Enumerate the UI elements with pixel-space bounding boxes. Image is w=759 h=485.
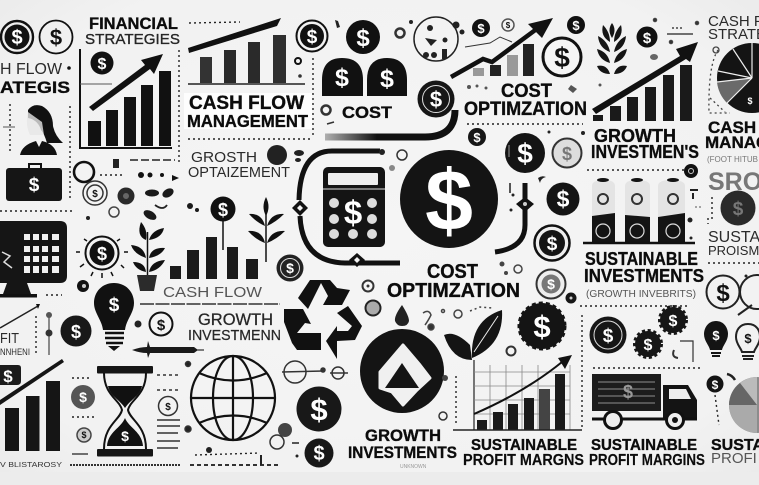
icon: drop	[395, 305, 409, 326]
heading: growth investments	[591, 126, 699, 162]
icon: black bulb right	[704, 321, 728, 356]
icons: marks around big coin	[379, 130, 585, 212]
label: groth optimizement: OPTAIZEMENT	[188, 164, 290, 181]
bar chart: rising bars with arrow	[80, 49, 172, 148]
icon: outlined coin top left	[40, 20, 72, 54]
divider: dotted vertical and horizontal	[580, 306, 700, 430]
icon: truck	[592, 374, 697, 428]
marks: left dotted details	[0, 295, 62, 356]
frame: dotted rules	[188, 58, 313, 139]
heading: cash flow management: MANAGEMENT	[187, 111, 308, 131]
bar chart: mini bars with zig arrow	[451, 18, 553, 77]
heading: sustainable investments: INVESTMENTS	[584, 266, 704, 286]
icons: marks right of vials	[688, 189, 702, 240]
icon: gray outlined coin	[552, 138, 582, 168]
label: sustain and programs right edge: PROISM	[708, 243, 759, 258]
heading: growth investments bottom: UNKNOWN	[400, 464, 427, 470]
icon: scattered leaves	[142, 187, 199, 222]
heading: cost: COST	[342, 103, 393, 122]
heading: cash management right edge	[705, 118, 759, 164]
icon: small mark near bags	[322, 20, 340, 124]
heading: sustain profit right edge: PROFI	[711, 450, 757, 467]
icon: outlined coin middle: $	[157, 317, 166, 334]
heading: growth investments: INVESTMEN'S	[591, 142, 699, 162]
heading: financial strategies	[85, 14, 180, 48]
icon: doodle oval	[414, 17, 458, 61]
icon: coin with rays	[76, 236, 128, 278]
heading: financial strategies: STRATEGIES	[85, 31, 180, 48]
marker: left diamond	[292, 200, 308, 216]
heading: sustain profit right edge	[711, 437, 759, 467]
bar chart: rising bars with big arrow	[592, 42, 698, 121]
heading: cash flow management: CASH FLOW	[189, 93, 304, 114]
heading: sustainable investments: (GROWTH INVEBRITS)	[586, 289, 696, 300]
icon: circle with triangular recycle	[360, 329, 444, 413]
icon: partial outlined coin and key	[738, 274, 759, 315]
icon: small outline ring: $	[506, 21, 511, 30]
icon: gear coin large: $	[533, 309, 551, 344]
icon: small coin right	[567, 16, 585, 34]
icon: small gray coin	[366, 300, 380, 316]
bar chart: lower left bars	[0, 359, 64, 451]
icon: fern	[597, 23, 627, 74]
icons: coins left of hourglass: $	[81, 430, 87, 440]
connector: thick curved line around coin	[325, 110, 455, 137]
connector: path around calculator	[299, 151, 400, 263]
heading: cut off cash flow strategies: H FLOW	[0, 61, 62, 78]
icon: gear coin upper: $	[669, 313, 678, 330]
icon: black coin: $	[517, 138, 533, 169]
icon: recycling arrows	[284, 280, 362, 359]
icon: ringed coin at curve	[418, 80, 454, 118]
heading: cost optimization top: OPTIMZATION	[464, 99, 587, 120]
heading: growth investment: INVESTMENN	[188, 327, 281, 344]
icon: small coin bottom right: $	[712, 378, 719, 392]
icon: ringed coin: $	[603, 326, 614, 347]
heading: growth investments bottom: INVESTMENTS	[348, 443, 457, 462]
label: cut off profit text	[0, 330, 30, 357]
icon: globe	[191, 356, 275, 440]
icon: gear coin upper	[660, 307, 686, 333]
heading: sustainable profit margins right	[589, 437, 705, 469]
icon: light bulb with dollar	[94, 283, 134, 351]
chart: pie right edge	[717, 43, 759, 113]
icon: ringed coin under heading: $	[547, 276, 555, 292]
icon: black bulb right: $	[712, 328, 720, 343]
icon: large outlined coin	[543, 38, 581, 76]
icon: crosshair rings	[282, 361, 348, 383]
icon: black coin mid right	[546, 182, 580, 216]
icon: black coin left of bulb	[60, 316, 92, 346]
heading: cost optimization main: OPTIMZATION	[387, 280, 520, 302]
icon: marks near heading	[500, 262, 522, 275]
chart: gray pie bottom right	[729, 377, 759, 433]
icon: outlined coin top left: $	[50, 25, 62, 50]
marks: scattered squiggles	[423, 307, 492, 330]
icons: small rings and marks	[74, 159, 179, 220]
icon: coin on stem: $	[218, 200, 228, 220]
icon: black coin lower centre	[296, 386, 342, 432]
icon: gray outlined coin: $	[562, 144, 572, 164]
icon: large outlined coin: $	[554, 42, 570, 73]
label: cut off profit text: NNHENI	[0, 347, 30, 357]
icon: ringed coin top left	[1, 21, 33, 53]
heading: sustainable profit margins right: SUSTAINABLE	[591, 437, 697, 454]
icon: ringed coin	[296, 20, 328, 52]
icon: money bag left	[322, 58, 363, 96]
icon: small dark coin	[77, 280, 89, 292]
heading: growth investments: GROWTH	[594, 126, 676, 146]
icon: dollar tag	[0, 365, 21, 386]
icon: black coin mid right: $	[557, 186, 570, 212]
icon: small black coin bottom: $	[313, 443, 325, 465]
icon: small marks by heading	[467, 84, 602, 93]
heading: sustainable profit margins right: PROFIT MARGINS	[589, 452, 705, 469]
label: sustain and programs right edge	[708, 229, 759, 263]
connector: right curved path with diamond	[495, 183, 534, 252]
icon: outline bulb right	[736, 324, 759, 359]
icon: dark coin right edge	[708, 190, 756, 226]
icon: outlined coin right	[706, 276, 740, 308]
label: groth optimizement	[188, 149, 290, 181]
icon: plant with leaves left	[131, 222, 165, 276]
icons: small rings and marks: $	[92, 189, 98, 200]
divider: dotted rule	[467, 123, 583, 125]
heading: growth investments bottom	[348, 426, 457, 470]
bottom row: fine print: V BLISTAROSY	[0, 462, 62, 469]
icon: light bulb with dollar: $	[109, 295, 120, 316]
heading: sustainable profit margins left: PROFIT MARGNS	[463, 452, 584, 469]
icon: two leaves	[444, 310, 502, 360]
chart: pie right edge: $	[747, 96, 753, 106]
icon: monitor with grid	[0, 221, 67, 298]
icon: ringed coin top left: $	[11, 27, 23, 49]
heading: cost optimization top	[464, 81, 587, 120]
label: groth optimizement: GROSTH	[191, 149, 257, 166]
icon: truck: $	[623, 382, 633, 402]
icon: coin top centre: $	[356, 25, 370, 52]
icon: small coin by fern	[636, 26, 658, 48]
icon: plant right of coin	[248, 197, 285, 262]
icon: small coin right: $	[572, 18, 580, 33]
icon: ringed coin centre: $	[286, 260, 294, 276]
icon: large central coin: $	[425, 153, 473, 249]
icon: dollar tag: $	[3, 367, 13, 386]
frame: dotted left panel	[0, 104, 72, 211]
icon: ringed coin centre	[276, 254, 304, 282]
icon: small dot ring	[566, 292, 576, 304]
icon: small ring right of recycle	[362, 280, 374, 292]
marks: small key line	[673, 341, 693, 362]
bar chart: rising bars with arrow: $	[98, 56, 107, 73]
label: cash flow: CASH FLOW	[163, 284, 263, 301]
icon: coin top centre	[346, 20, 380, 54]
icon: calculator: $	[344, 194, 362, 231]
heading: financial strategies: FINANCIAL	[89, 14, 178, 33]
heading: cash flow management	[184, 93, 312, 131]
icon: money bag right: $	[380, 65, 394, 93]
icon: dark blobs	[267, 145, 304, 165]
icon: person	[20, 105, 63, 155]
marker: lower diamond	[349, 253, 365, 267]
heading: sustainable investments: SUSTAINABLE	[585, 249, 698, 269]
icon: ringed coin	[590, 316, 626, 354]
icon: gear coin large	[519, 303, 565, 349]
icon: outlined coin middle	[134, 312, 172, 336]
icon: three vials	[583, 178, 695, 243]
heading: sustainable profit margins left: SUSTAINABLE	[471, 437, 577, 454]
icon: calculator	[323, 167, 385, 247]
icon: plant pot	[137, 275, 157, 291]
icon: black coin lower centre: $	[310, 392, 328, 427]
icons: document lines beside globe: $	[165, 402, 171, 413]
label: cash flow	[140, 284, 280, 304]
divider: dotted rule with coin	[587, 164, 698, 178]
icon: small coin bottom right	[706, 374, 735, 425]
icon: small coin: $	[473, 130, 481, 145]
heading: cash strategies right edge	[708, 13, 759, 43]
divider: dotted vertical	[178, 50, 180, 165]
bar chart: centre cash flow bars	[170, 237, 258, 279]
icon: ringed coin cut by vials: $	[547, 234, 558, 255]
icon: small black coin bottom	[304, 438, 334, 468]
icon: gear coin lower	[635, 331, 661, 357]
arrow: horizontal sword shape	[132, 341, 204, 358]
icon: briefcase	[6, 164, 62, 201]
icon: briefcase: $	[29, 175, 40, 196]
icon: dark coin right edge: $	[733, 199, 744, 220]
heading: cost optimization main	[387, 261, 520, 302]
icon: outlined coin right: $	[716, 280, 730, 307]
heading: cost optimization top: COST	[501, 81, 552, 102]
heading: sustainable profit margins left	[463, 437, 584, 469]
icon: outline bulb right: $	[744, 331, 752, 346]
icon: coin on stem	[210, 196, 236, 250]
icon: hourglass: $	[121, 428, 129, 444]
heading: growth investments bottom: GROWTH	[365, 426, 441, 445]
marks: scratchy dashes top right	[650, 18, 698, 60]
icon: coin with rays: $	[97, 244, 107, 264]
icon: ringed coin cut by vials	[534, 226, 570, 260]
icon: small ring above chart	[439, 346, 516, 426]
icon: money bag left: $	[335, 64, 349, 92]
icon: small coin	[468, 128, 486, 146]
icon: ringed coin: $	[307, 27, 318, 48]
icon: black coin left of bulb: $	[71, 322, 81, 342]
bar chart: four bars with trend wedge	[188, 18, 305, 84]
icons: coins left of hourglass: $	[79, 389, 87, 405]
icon: ringed coin under heading	[536, 270, 566, 298]
icon: large central coin	[400, 150, 498, 249]
icon: ringed coin at curve: $	[430, 87, 442, 112]
icon: black coin	[505, 133, 545, 173]
label: cut off profit text: FIT	[0, 330, 19, 347]
heading: growth investment: GROWTH	[198, 311, 273, 329]
heading: cut off cash flow strategies: ATEGIS	[0, 78, 70, 97]
icon: small coin by fern: $	[643, 30, 652, 47]
icon: money bag right	[367, 58, 407, 96]
icon: small coin top	[472, 19, 490, 37]
heading: growth investment	[188, 311, 281, 344]
icon: small ring	[295, 58, 302, 78]
heading: cut off cash flow strategies	[0, 61, 71, 97]
heading: cost optimization main: COST	[427, 261, 478, 283]
icon: gear coin lower: $	[644, 337, 653, 354]
marks: dashed arc by pie	[709, 47, 730, 113]
bar chart: grid bars with arrow	[453, 355, 582, 430]
icons: small dots and ring near oval	[396, 20, 464, 38]
icon: small coin top: $	[477, 21, 485, 36]
icon: hourglass	[97, 366, 153, 456]
bottom row: fine print	[0, 447, 280, 469]
icon: small outline ring	[502, 19, 514, 31]
icons: coins left of hourglass	[71, 378, 96, 454]
icons: document lines beside globe	[157, 362, 191, 448]
heading: sustainable investments	[584, 249, 704, 300]
icon: overlapping rings	[270, 423, 299, 458]
